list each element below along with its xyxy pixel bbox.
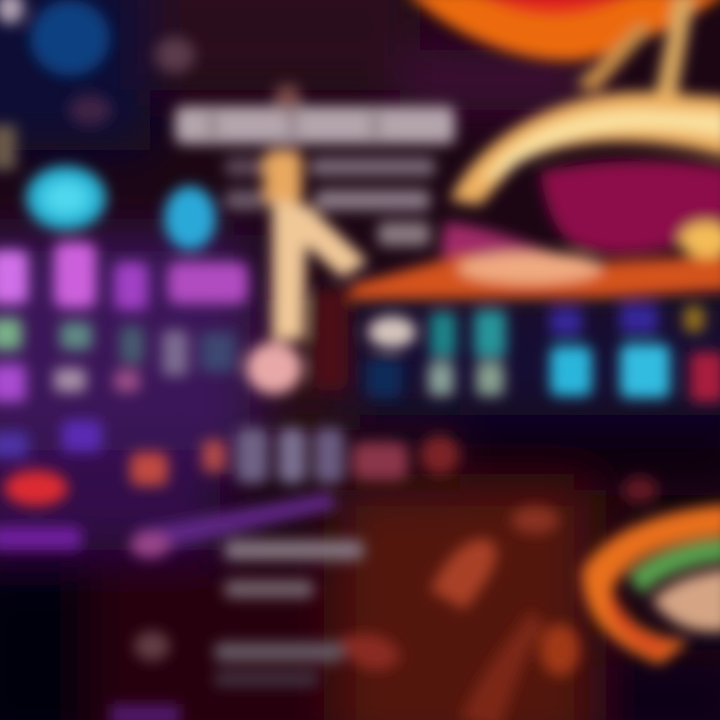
panel: orange foreground hand [340,476,658,720]
panel: top-left blue glow [0,0,195,170]
panel: ceiling lamp arcs top right [405,0,720,205]
heading: blurred title text [175,106,455,246]
icon: standing figure [246,85,368,394]
panel: slot machines right [366,304,720,402]
panel: roulette table bottom right [582,504,720,664]
icon: cyan lights left [26,166,216,250]
panel: red lights and lower blurred text [0,428,460,720]
panel: purple slot machines left [0,242,248,458]
panel: magenta dome under lamp [350,161,720,300]
